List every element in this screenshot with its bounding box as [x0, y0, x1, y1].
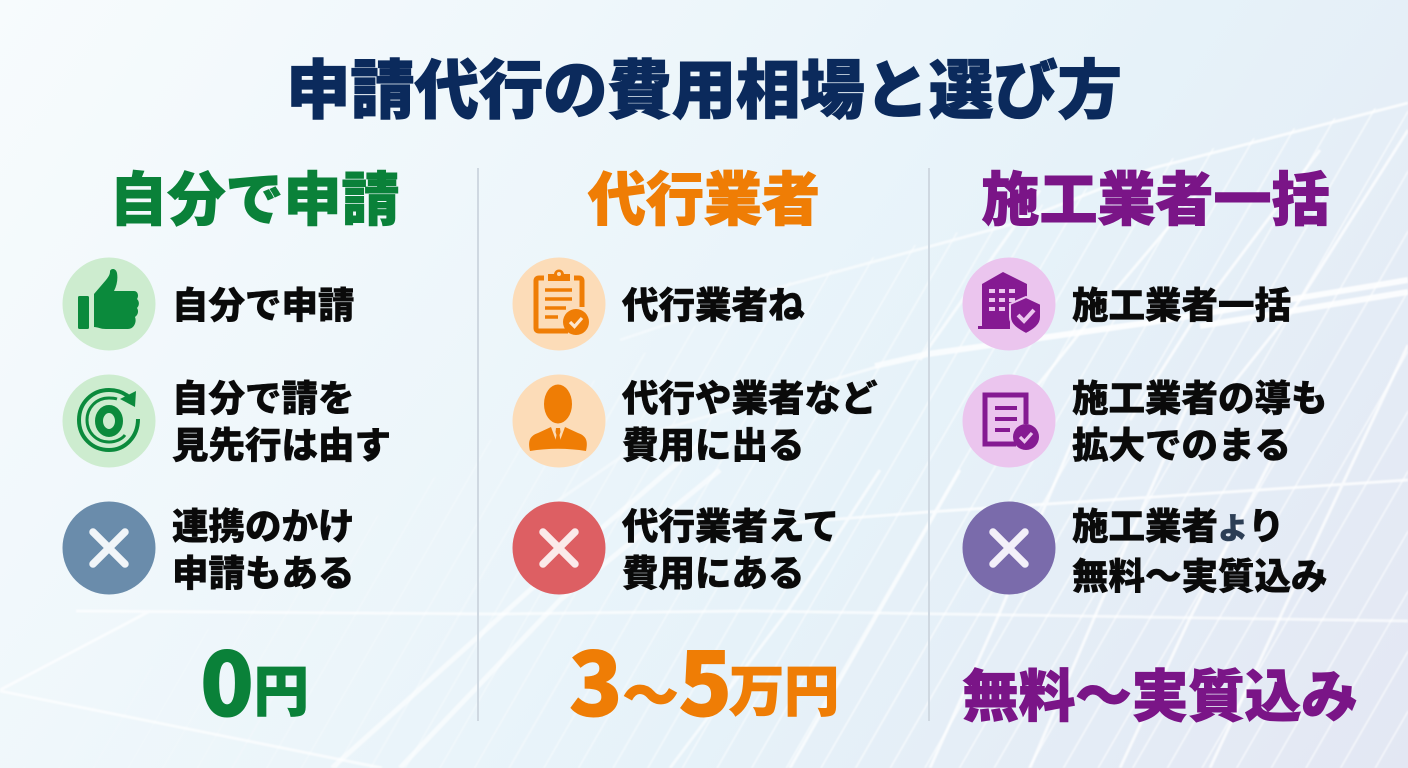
- heading: 自分で申請: [109, 153, 400, 237]
- text: 施工業者の導も: [1072, 369, 1328, 422]
- text: [1072, 497, 1328, 600]
- text: 見先行は由す: [172, 416, 391, 469]
- divider: [928, 168, 930, 721]
- heading: 施工業者一括: [981, 153, 1330, 237]
- text: 代行業者ね: [622, 276, 804, 329]
- icon: clipboard with check: [512, 258, 606, 350]
- text: [172, 369, 391, 469]
- text: 拡大でのまる: [1072, 416, 1291, 469]
- icon: zero with circular arrow: [62, 374, 156, 468]
- text: [1072, 369, 1328, 469]
- panel: 施工業者一括: [962, 153, 1358, 733]
- text: 代行業者えて: [622, 497, 839, 550]
- divider: [477, 168, 479, 721]
- panel: 代行業者: [512, 153, 878, 742]
- text: 費用にある: [622, 544, 804, 597]
- panel: 自分で申請: [62, 153, 400, 742]
- price: 無料〜実質込み: [962, 651, 1358, 733]
- icon: cross: [512, 502, 606, 594]
- icon: cross: [62, 502, 156, 594]
- price: 0円: [200, 615, 309, 742]
- text: [172, 497, 354, 597]
- text: 自分で請を: [172, 369, 354, 422]
- text: [622, 497, 839, 597]
- text: [622, 369, 878, 469]
- text: 施工業者一括: [1072, 276, 1291, 329]
- text: 申請もある: [172, 544, 354, 597]
- text: 代行や業者など: [622, 369, 878, 422]
- text: 連携のかけ: [172, 497, 354, 550]
- icon: person in suit: [512, 374, 606, 468]
- icon: cross: [962, 502, 1056, 594]
- title: 申請代行の費用相場と選び方: [286, 38, 1122, 132]
- text: 施工業者より: [1072, 497, 1284, 550]
- heading: 代行業者: [588, 153, 820, 237]
- text: 無料〜実質込み: [1072, 547, 1328, 600]
- text: 費用に出る: [622, 416, 804, 469]
- icon: building with shield: [962, 258, 1056, 350]
- icon: document with check: [962, 374, 1056, 468]
- price: 3〜5万円: [569, 615, 839, 742]
- icon: thumbs up: [62, 258, 156, 350]
- text: 自分で申請: [172, 276, 354, 329]
